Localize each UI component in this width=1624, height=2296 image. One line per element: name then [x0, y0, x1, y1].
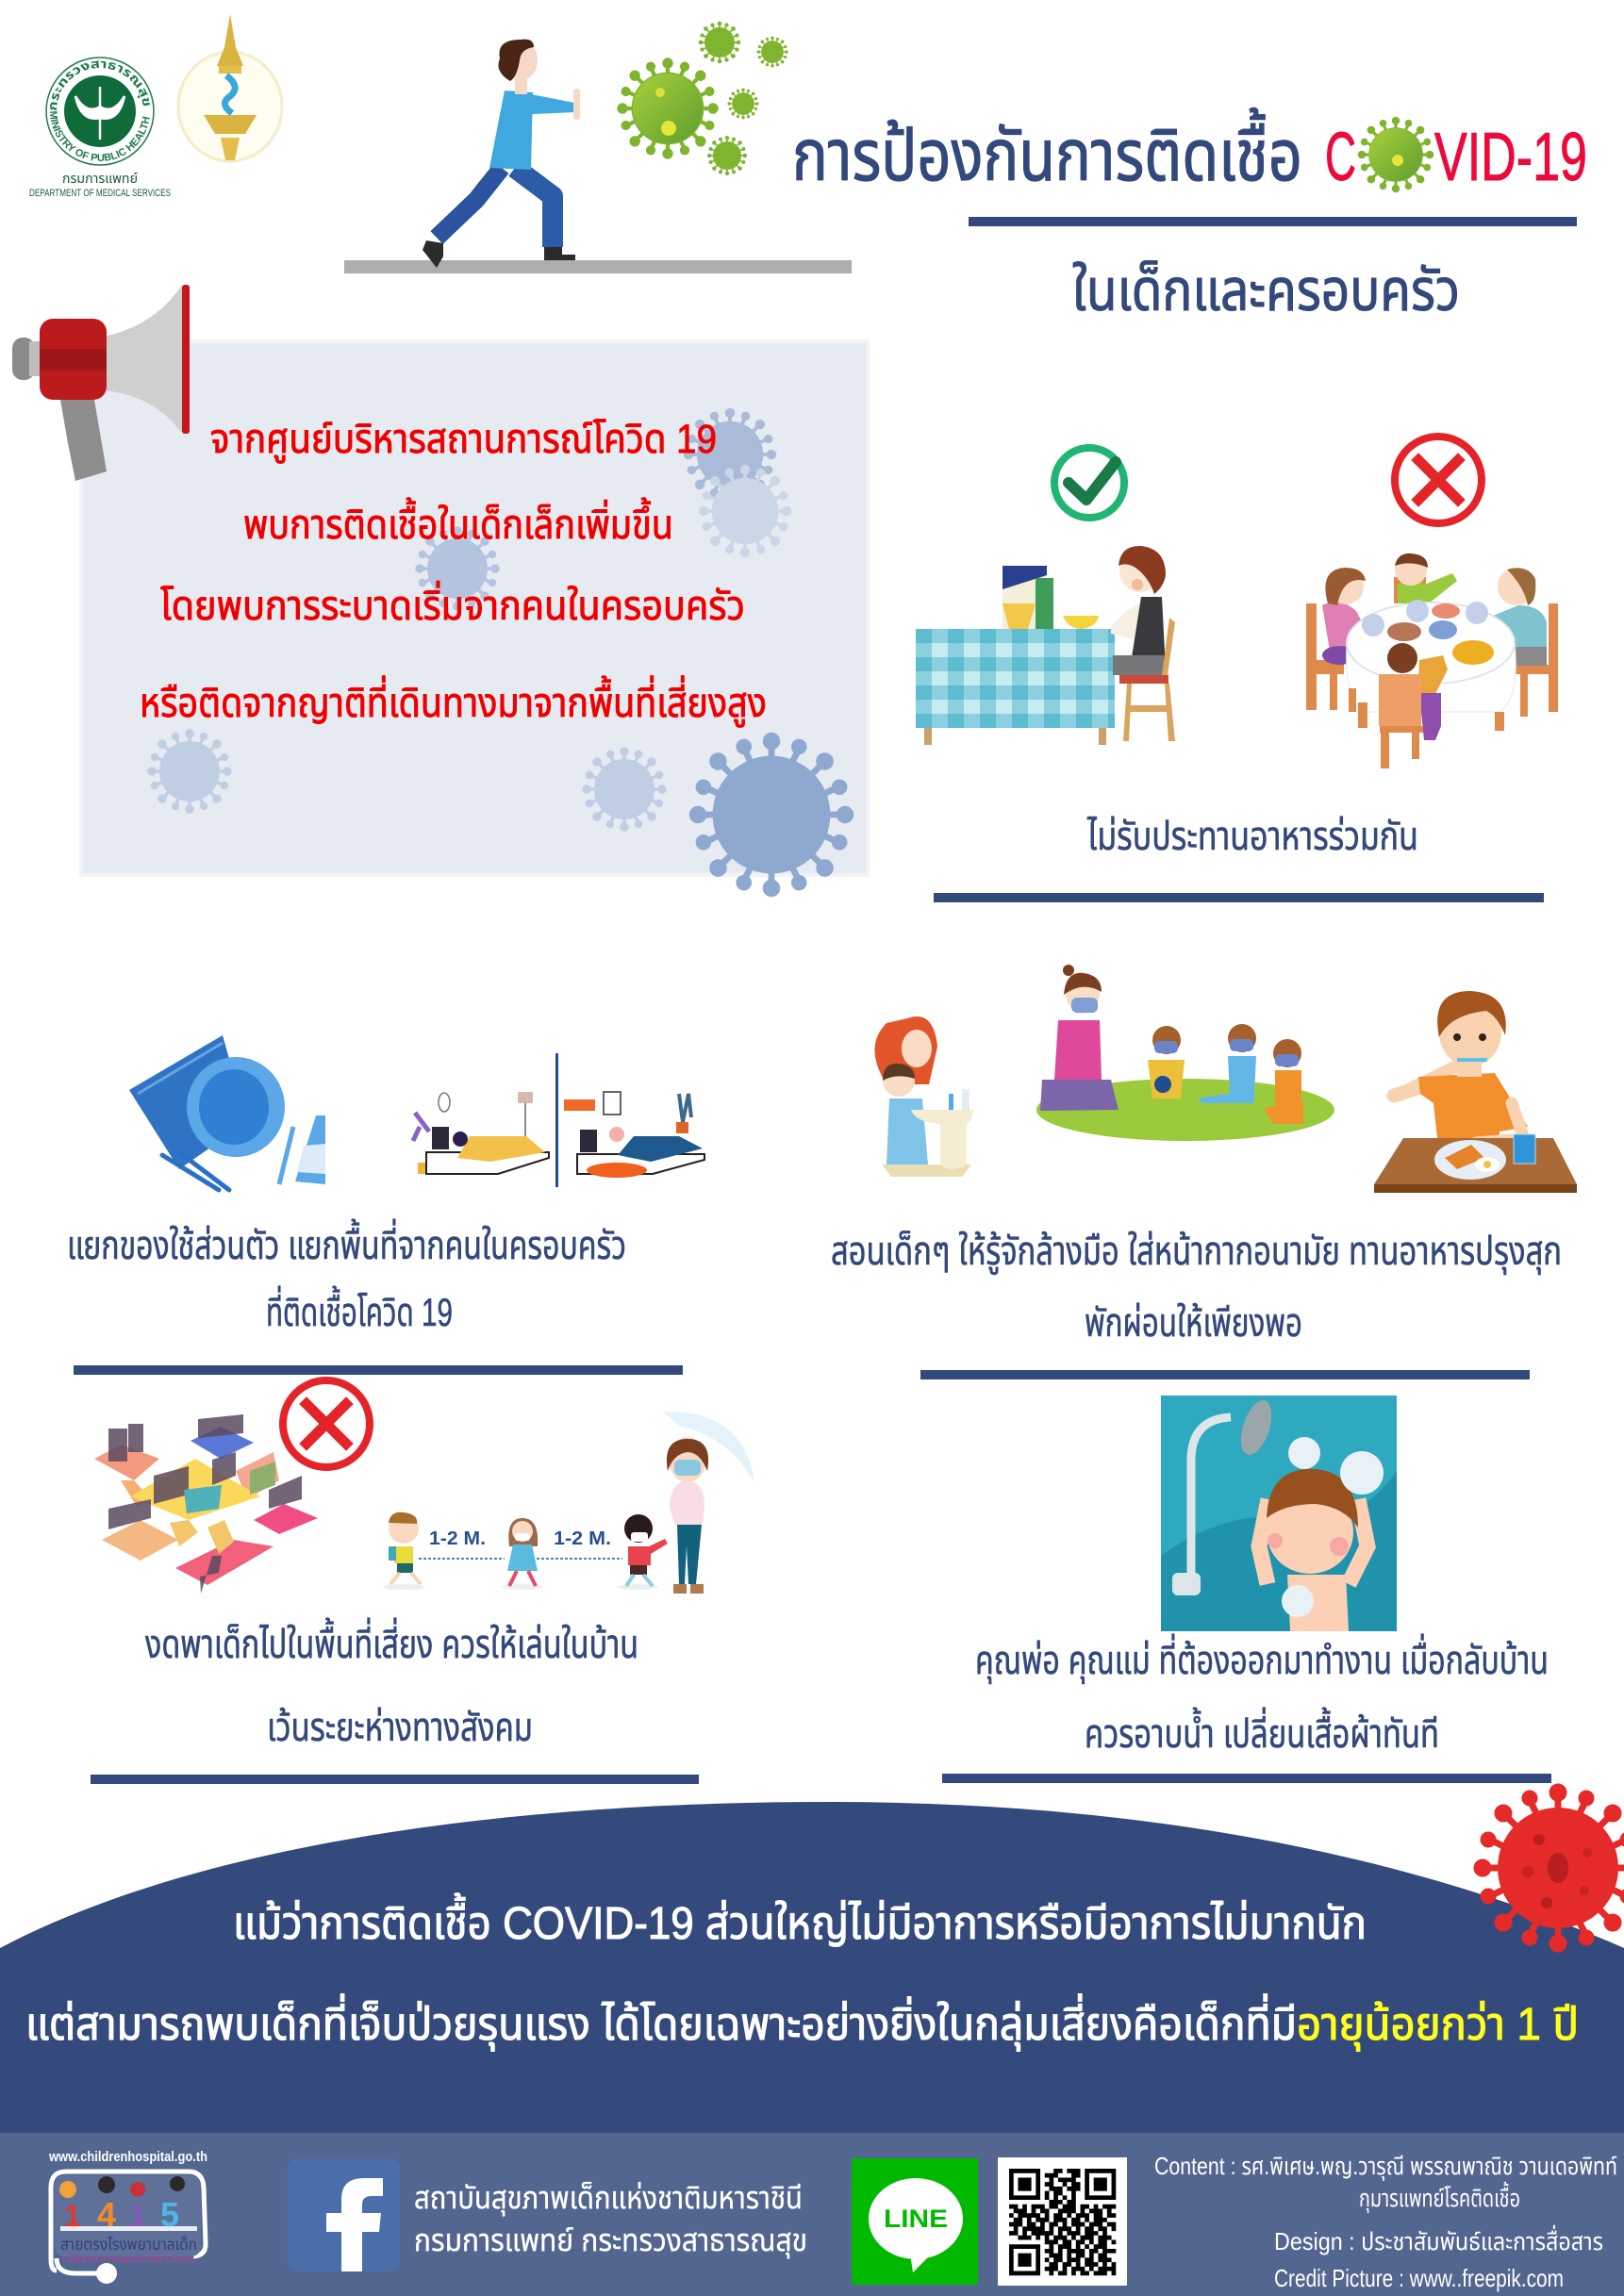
illustration: social distancing: 1-2 M.: [429, 1528, 486, 1549]
logo: 1415 call center: Children's Hospital Call Center: [62, 2255, 195, 2265]
illustration: child showering: [1161, 1396, 1397, 1631]
facebook page name: กรมการแพทย์ กระทรวงสาธารณสุข: [414, 2222, 807, 2259]
QR code: [998, 2157, 1127, 2286]
illustration: teacher with masked children: [1036, 965, 1334, 1141]
credits: [1154, 2152, 1617, 2292]
credits: กุมารแพทย์โรคติดเชื้อ: [1359, 2181, 1520, 2213]
facebook page name: [414, 2180, 807, 2259]
panel: announcement: [79, 339, 870, 894]
illustration: boy brushing teeth at table: [1374, 991, 1577, 1193]
icon: LINE: LINE: [884, 2205, 948, 2233]
green kid: [1398, 573, 1457, 603]
icon: cross mark: [283, 1380, 370, 1467]
banner text: แม้ว่าการติดเชื้อ COVID-19 ส่วนใหญ่ไม่มีอาการหรือมีอาการไม่มากนัก: [233, 1892, 1367, 1949]
logo: Ministry of Public Health: MINISTRY OF PUBLIC HEALTH: [49, 111, 150, 161]
banner text: อายุน้อยกว่า 1 ปี: [1297, 2000, 1579, 2052]
logo: Ministry of Public Health: กรมการแพทย์: [62, 171, 138, 186]
title: การป้องกันการติดเชื้อ: [792, 107, 1302, 196]
caption: separate belongings: แยกของใช้ส่วนตัว แยกพื้นที่จากคนในครอบครัว: [67, 1218, 626, 1267]
announcement text: หรือติดจากญาติที่เดินทางมาจากพื้นที่เสี่ยงสูง: [140, 675, 767, 727]
logo: 1415 call center: 1: [129, 2199, 146, 2233]
announcement text: โดยพบการระบาดเริ่มจากคนในครอบครัว: [160, 581, 745, 629]
caption: teach children hygiene: พักผ่อนให้เพียงพอ: [1085, 1300, 1302, 1345]
icon: facebook: [288, 2159, 400, 2271]
caption: avoid risky places: งดพาเด็กไปในพื้นที่เสี่ยง ควรให้เล่นในบ้าน: [145, 1617, 638, 1666]
title: C: [1325, 120, 1356, 195]
logo: royal emblem: [178, 14, 282, 161]
footer: [0, 2133, 1624, 2296]
panel virus decorations: [149, 410, 851, 894]
caption: avoid risky places: [145, 1617, 638, 1749]
illustration: separated beds: [413, 1053, 704, 1187]
illustration: social distancing: 1-2 M.: [554, 1528, 611, 1549]
icon: check mark: [1054, 448, 1124, 518]
chairs: [1306, 577, 1558, 717]
announcement text: พบการติดเชื้อในเด็กเล็กเพิ่มขึ้น: [243, 497, 673, 548]
website url: www.childrenhospital.go.th: [48, 2149, 207, 2165]
banner text: [25, 1892, 1579, 2052]
illustration: social distancing: [383, 1412, 754, 1594]
illustration: isometric shopping mall: [94, 1414, 318, 1594]
icon: megaphone: [12, 285, 190, 481]
illustration: separate dishes and toothbrush: [129, 1035, 325, 1190]
round table: [1347, 643, 1516, 712]
icon: LINE: [852, 2158, 978, 2285]
caption: no shared meals: ไม่รับประทานอาหารร่วมกัน: [1086, 814, 1418, 858]
logo: Ministry of Public Health: [29, 57, 171, 199]
caption: separate belongings: [67, 1218, 626, 1334]
logo: 1415 call center: 1: [64, 2199, 81, 2233]
facebook page name: สถาบันสุขภาพเด็กแห่งชาติมหาราชินี: [414, 2180, 803, 2217]
logo: 1415 call center: [51, 2172, 206, 2284]
logo: 1415 call center: 5: [160, 2195, 179, 2234]
subtitle: ในเด็กและครอบครัว: [1072, 258, 1460, 323]
illustration: hand washing: [875, 1016, 973, 1177]
green virus cluster: [619, 23, 787, 174]
illustration: family eating together: [1306, 553, 1558, 768]
icon: cross mark: [1395, 437, 1482, 523]
logo: Ministry of Public Health: กระทรวงสาธารณสุข: [50, 60, 150, 110]
logo: Ministry of Public Health: DEPARTMENT OF MEDICAL SERVICES: [29, 188, 171, 199]
icon: virus as letter O: [1359, 118, 1433, 191]
ground bar: [344, 260, 852, 273]
illustration: child eating alone: [916, 546, 1175, 745]
pink woman: [1322, 602, 1377, 660]
announcement text: จากศูนย์บริหารสถานการณ์โควิด 19: [210, 417, 717, 463]
child at front: [1417, 655, 1448, 698]
caption: avoid risky places: เว้นระยะห่างทางสังคม: [267, 1705, 533, 1749]
logo: 1415 call center: สายตรงโรงพยาบาลเด็ก: [60, 2236, 197, 2254]
icon: red virus: [1477, 1787, 1624, 1949]
logo: 1415 call center: 4: [97, 2195, 116, 2234]
caption: parents wash after work: [975, 1633, 1549, 1756]
caption: teach children hygiene: [831, 1229, 1562, 1345]
blue man: [1477, 605, 1547, 651]
banner: warning message: [0, 1802, 1624, 2133]
illustration: person pushing away virus: [344, 40, 852, 273]
caption: separate belongings: ที่ติดเชื้อโควิด 19: [266, 1285, 453, 1334]
banner text: แต่สามารถพบเด็กที่เจ็บป่วยรุนแรง ได้โดยเฉพาะอย่างยิ่งในกลุ่มเสี่ยงคือเด็กที่มี: [25, 1993, 1297, 2052]
person: [423, 40, 580, 268]
caption: parents wash after work: ควรอาบน้ำ เปลี่ยนเสื้อผ้าทันที: [1085, 1707, 1439, 1756]
announcement text: [140, 417, 767, 727]
